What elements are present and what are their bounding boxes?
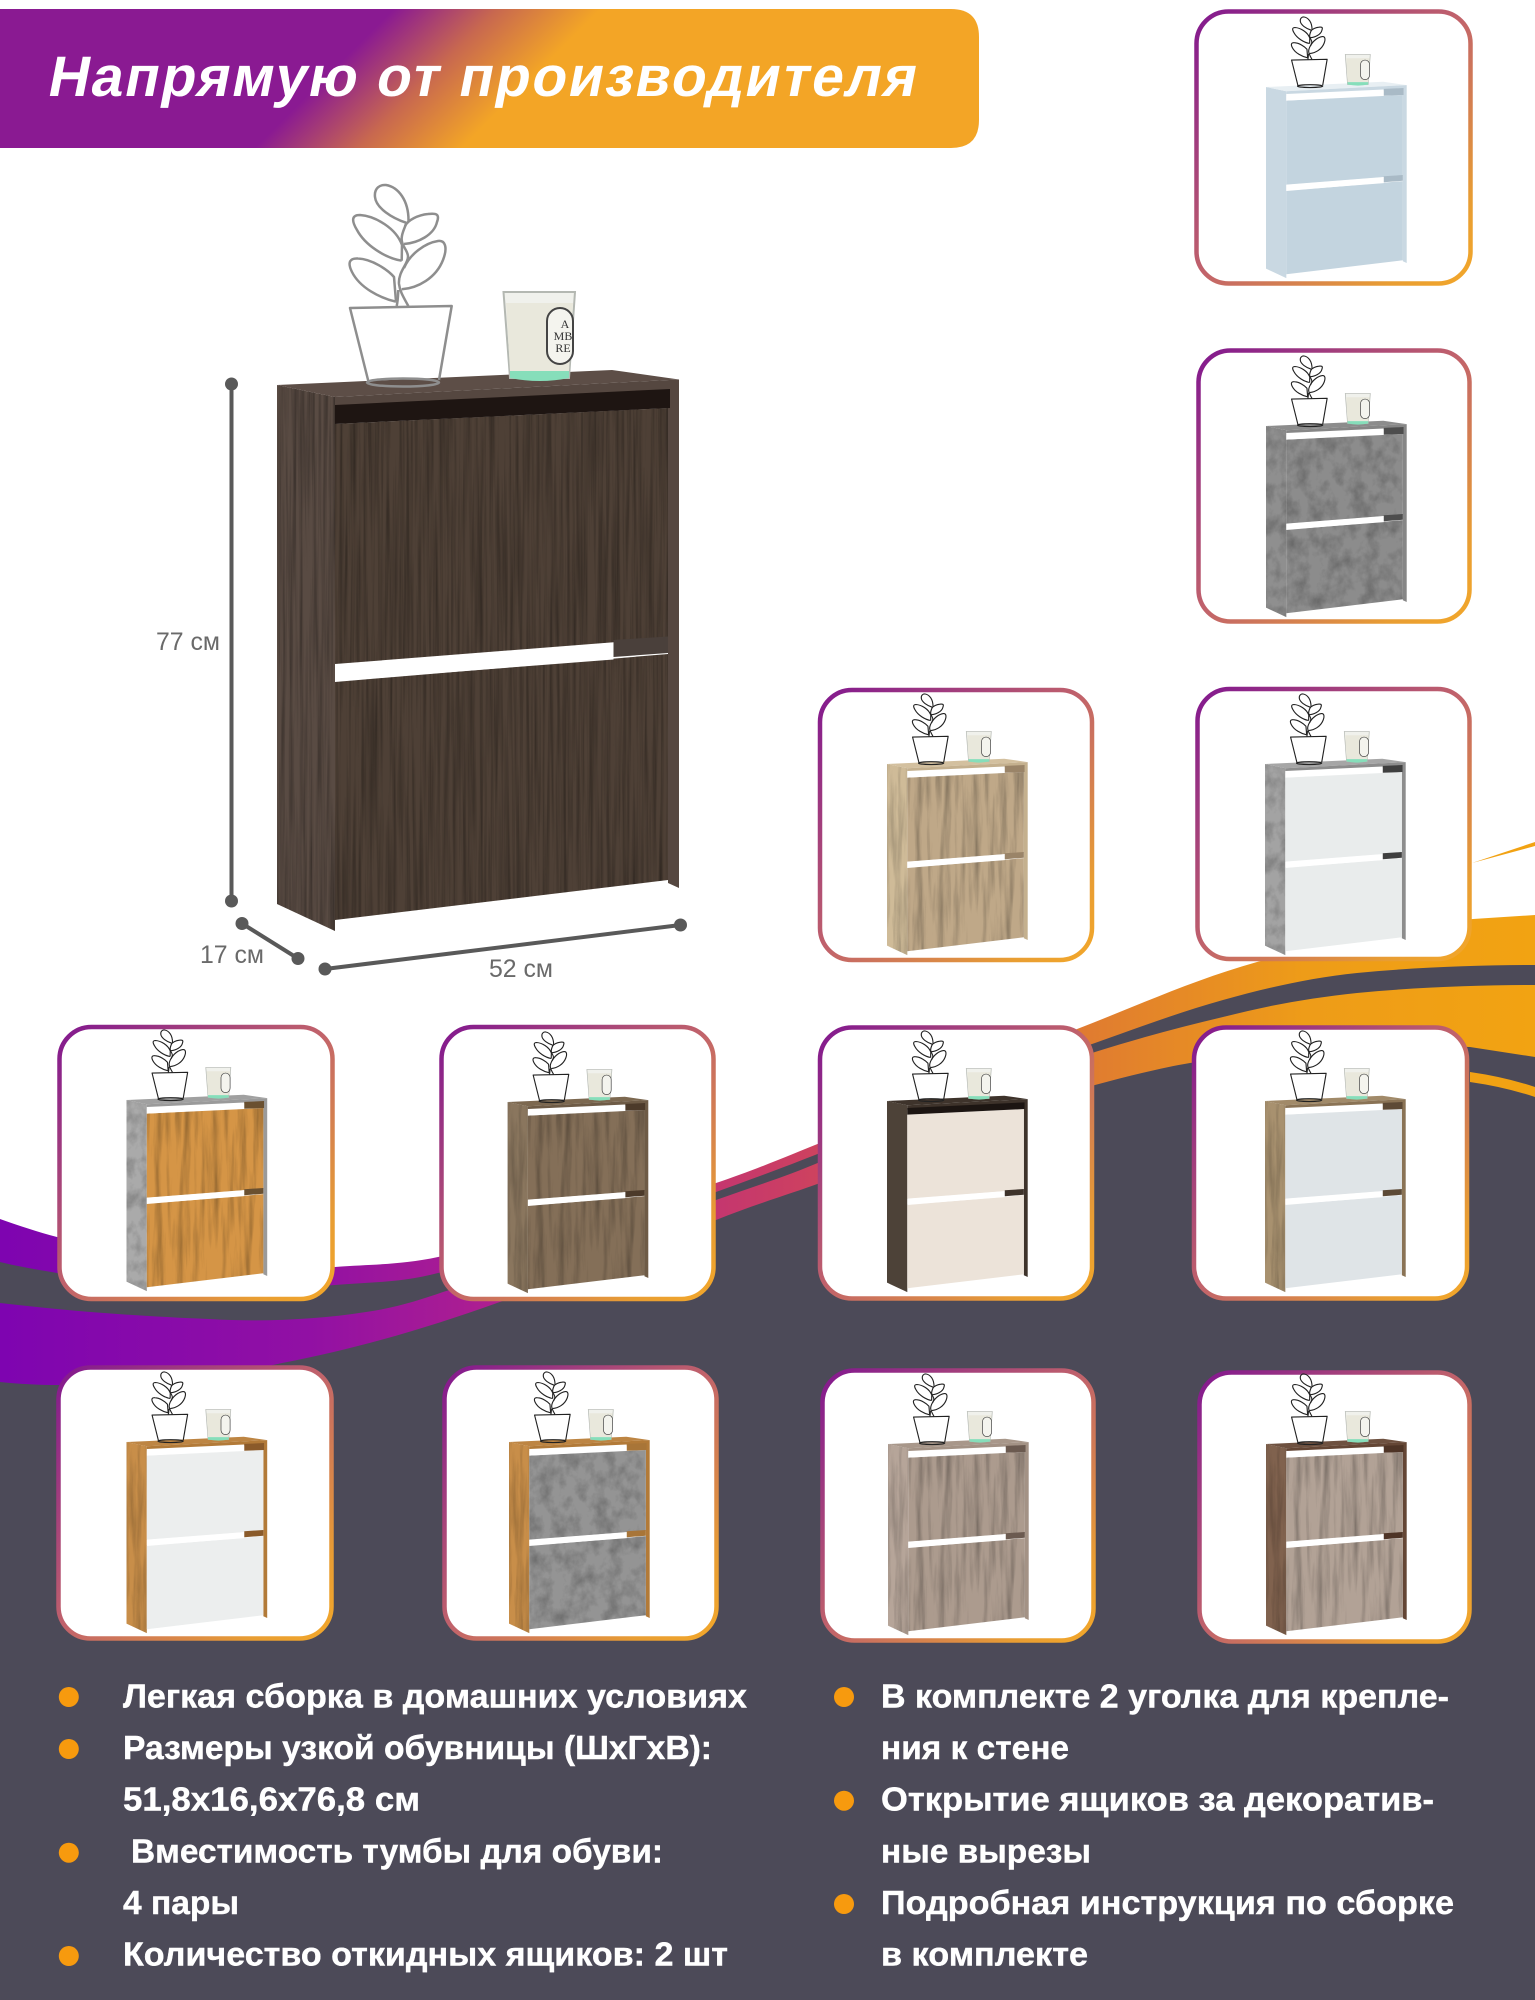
dimension: depth 17 cm: 17 см: [200, 941, 264, 969]
bullet: instructions: [834, 1884, 1454, 1973]
main product: wenge shoe cabinet: MB: [554, 329, 572, 343]
swatch: craft oak and concrete: [444, 1368, 716, 1638]
bullet: drawer opening: ные вырезы: [881, 1832, 1091, 1870]
dimension: height 77 cm: [156, 378, 238, 908]
bullet: dimensions: Размеры узкой обувницы (ШхГхВ):: [123, 1729, 712, 1766]
title banner: Напрямую от производителя: [43, 45, 924, 109]
swatch: grey concrete: [1198, 350, 1470, 622]
swatch: sonoma oak: [820, 690, 1092, 960]
bullet: dimensions: 51,8х16,6х76,8 см: [123, 1781, 420, 1818]
swatch: craft oak and white: [58, 1368, 332, 1638]
swatch: taupe: [822, 1370, 1094, 1640]
bullet: wall brackets: В комплекте 2 уголка для крепле-: [881, 1678, 1449, 1714]
dimension: width 52 cm: 52 см: [489, 955, 553, 983]
bullet: dimensions: [59, 1729, 712, 1818]
swatch: wenge and cream: [820, 1028, 1092, 1298]
swatch: concrete and craft oak: [60, 1027, 332, 1299]
bullet: drawer count: Количество откидных ящиков: 2 шт: [123, 1936, 728, 1973]
swatch: light blue: [1196, 12, 1470, 284]
bullet: capacity: 4 пары: [123, 1884, 239, 1921]
bullet: wall brackets: [834, 1678, 1449, 1766]
bullet: drawer opening: Открытие ящиков за декоратив-: [881, 1781, 1434, 1818]
swatch: walnut and taupe: [1200, 1372, 1470, 1642]
bullet: instructions: Подробная инструкция по сборке: [881, 1884, 1454, 1921]
bullet: instructions: в комплекте: [881, 1936, 1088, 1973]
bullet: wall brackets: ния к стене: [881, 1729, 1069, 1766]
dimension: height 77 cm: 77 см: [156, 628, 220, 656]
bullet: easy assembly: Легкая сборка в домашних условиях: [123, 1678, 748, 1714]
main product: wenge shoe cabinet: A: [561, 317, 570, 331]
swatch: dark oak: [442, 1027, 714, 1299]
swatch: concrete and white: [1198, 689, 1470, 959]
dimension: width 52 cm: [318, 918, 687, 983]
title banner: [0, 9, 979, 148]
main product: wenge shoe cabinet: [277, 185, 679, 931]
swatch: oak and white: [1194, 1028, 1467, 1298]
bullet: capacity: Вместимость тумбы для обуви:: [131, 1832, 663, 1870]
dimension: depth 17 cm: [200, 917, 304, 969]
bullet: capacity: [59, 1832, 663, 1921]
main product: wenge shoe cabinet: RE: [555, 341, 571, 355]
bullet: drawer opening: [834, 1781, 1434, 1870]
